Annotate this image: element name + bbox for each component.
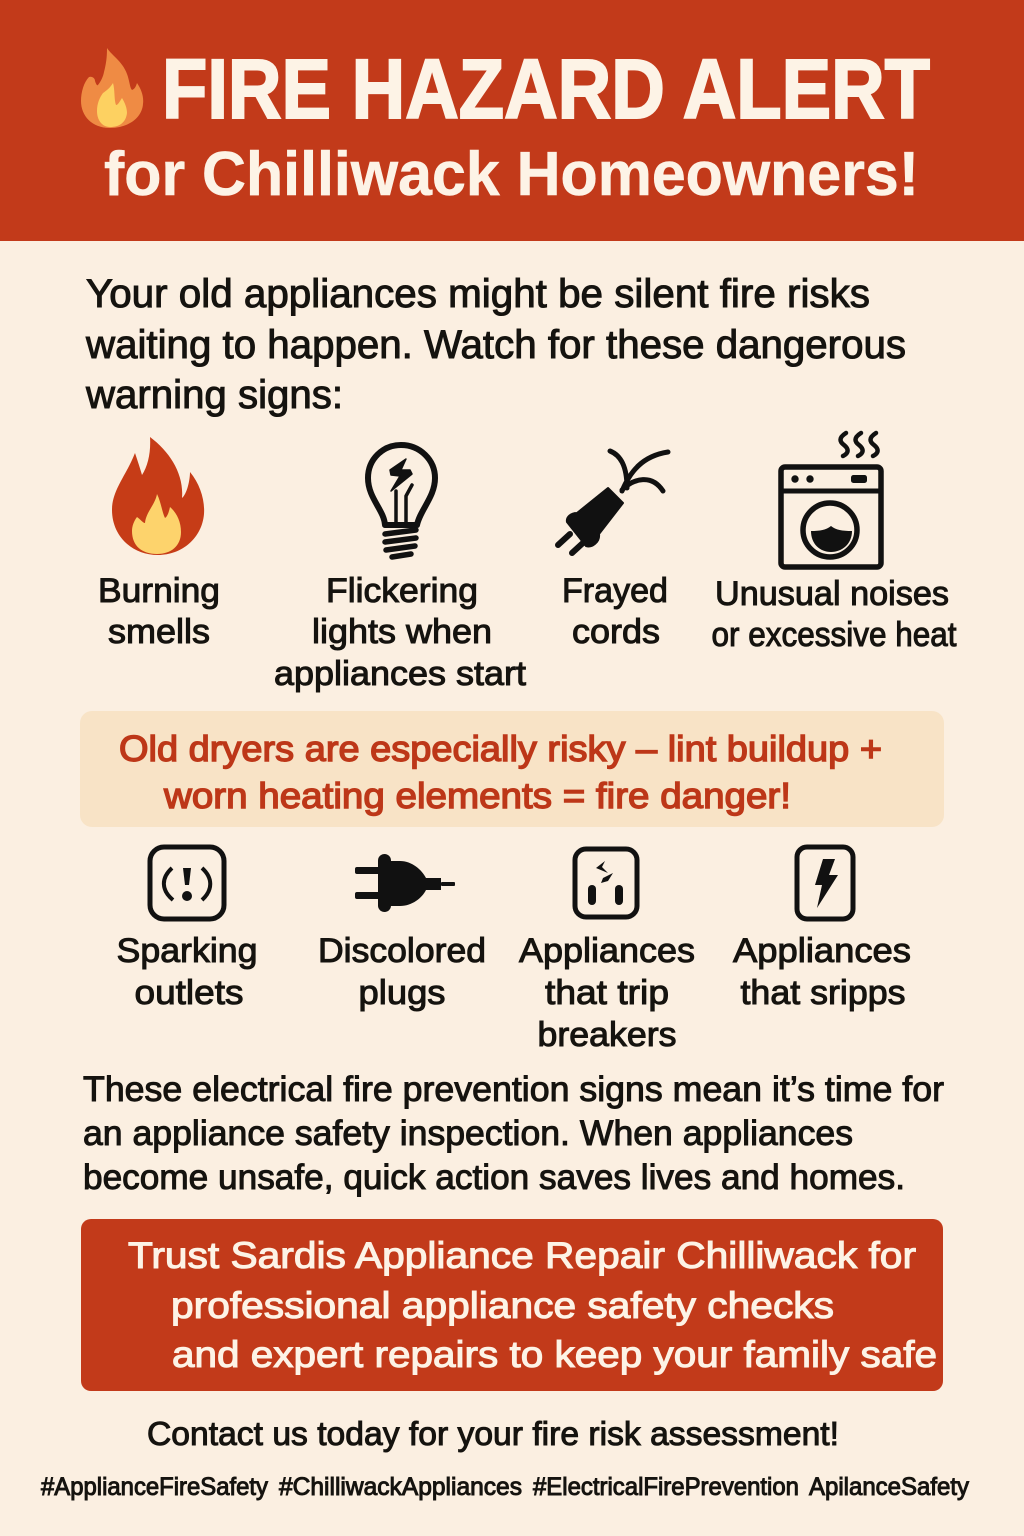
label: burning smells: Burning [98,572,220,610]
label: frayed cords: cords [572,613,660,651]
label: flickering lights [274,572,527,693]
contact line: Contact us today for your fire risk assessment! [147,1415,839,1452]
icon: discolored plug [355,854,455,912]
icon: hot washing machine [781,433,881,567]
body text: inspection: These electrical fire prevention signs mean it’s time for [83,1070,944,1109]
icon: flickering light bulb [368,445,435,557]
body text: inspection [83,1070,944,1197]
label: flickering lights: lights when [312,613,492,651]
hashtags: #ElectricalFirePrevention [533,1473,799,1501]
label: appliances that sripps [733,932,911,1012]
icon: outlet tripping breaker [575,849,637,917]
title line 2: for Chilliwack Homeowners! [104,140,919,209]
icon: header flame [81,48,143,128]
label: appliances that trip breakers: Appliances [519,932,695,970]
intro text: waiting to happen. Watch for these dangerous [85,323,906,367]
label: appliances that trip breakers [519,932,695,1054]
label: unusual noises: or excessive heat [712,616,957,654]
title line 1: FIRE HAZARD ALERT [162,42,930,136]
label: burning smells: smells [108,613,210,651]
callout: old dryers [80,711,944,827]
label: discolored plugs: Discolored [318,932,486,970]
call to action panel: professional appliance safety checks [171,1285,834,1326]
label: appliances that sripps: that sripps [740,974,906,1012]
label: unusual noises: Unusual noises [715,575,949,613]
callout: old dryers: worn heating elements = fire danger! [163,775,791,816]
call to action panel: Trust Sardis Appliance Repair Chilliwack for [128,1235,916,1276]
body text: inspection: an appliance safety inspection. When appliances [83,1114,853,1153]
label: sparking outlets: outlets [134,974,244,1012]
intro text [85,272,906,417]
label: frayed cords [562,572,668,651]
icon: lightning panel [797,847,853,919]
label: sparking outlets: Sparking [116,932,258,970]
label: discolored plugs: plugs [358,974,446,1012]
icon: burning smell flame [112,437,204,555]
hashtags [41,1473,969,1501]
hashtags: #ApplianceFireSafety [41,1473,268,1501]
header banner [0,0,1024,241]
label: appliances that sripps: Appliances [733,932,911,970]
icon: sparking outlet [150,847,224,919]
label: burning smells [98,572,220,651]
intro text: Your old appliances might be silent fire risks [86,272,870,316]
call to action panel [81,1219,943,1391]
icon: frayed cord [558,451,668,553]
body text: inspection: become unsafe, quick action saves lives and homes. [83,1158,905,1197]
label: flickering lights: appliances start [274,655,527,693]
hashtags: ApilanceSafety [809,1473,969,1501]
label: unusual noises [712,575,957,654]
label: appliances that trip breakers: that trip [545,974,669,1012]
label: sparking outlets [116,932,258,1012]
label: frayed cords: Frayed [562,572,668,610]
call to action panel: and expert repairs to keep your family safe [172,1334,937,1375]
label: discolored plugs [318,932,486,1012]
label: flickering lights: Flickering [326,572,478,610]
callout: old dryers: Old dryers are especially risky – lint buildup + [119,728,882,769]
label: appliances that trip breakers: breakers [538,1016,676,1054]
hashtags: #ChilliwackAppliances [279,1473,522,1501]
intro text: warning signs: [85,373,343,417]
